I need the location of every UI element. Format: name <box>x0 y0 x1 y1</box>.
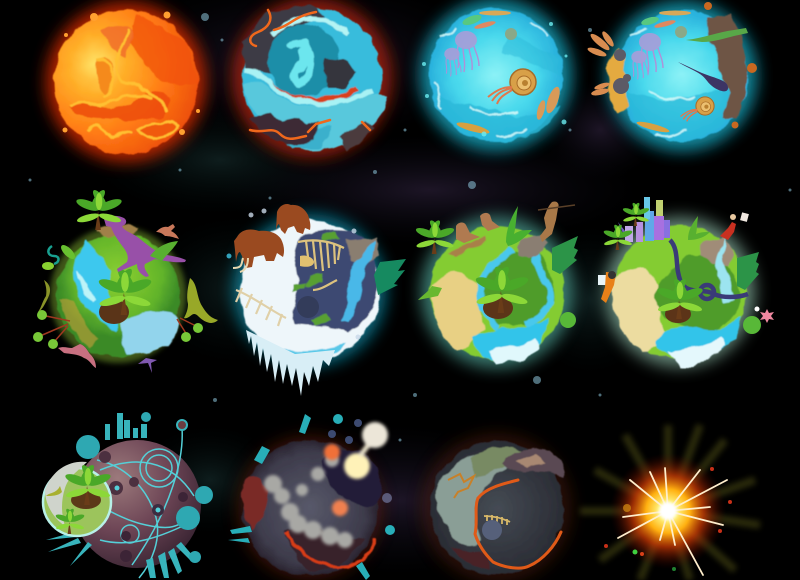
icon: interior dark green <box>480 250 554 326</box>
icon: mammoth small <box>276 204 310 234</box>
icon: satellite <box>177 420 187 430</box>
planet 6: ice age <box>226 204 406 396</box>
background: stars <box>28 13 792 442</box>
icon: lava cracks <box>475 480 561 568</box>
icon: final star burst <box>580 425 760 580</box>
icon: grey rocks <box>613 49 631 94</box>
icon: bubbles <box>422 22 568 136</box>
icon: conifers <box>552 236 578 274</box>
icon: dinosaur skeleton <box>298 240 344 290</box>
icon: central palm <box>656 277 704 319</box>
icon: top right rock <box>500 448 564 478</box>
icon: glass dome with palm <box>43 462 112 536</box>
icon: teal spheres <box>76 412 213 563</box>
icon: palm right <box>688 216 710 240</box>
icon: small white flower <box>754 306 760 312</box>
icon: dark fish <box>678 62 728 91</box>
icon: purple dinosaur <box>104 216 186 277</box>
icon: land left <box>605 46 628 114</box>
icon: icicles <box>246 330 335 396</box>
icon: left fronds <box>418 286 442 300</box>
icon: bottom lava zone <box>285 526 365 572</box>
icon: mammoth large <box>233 229 284 272</box>
icon: orange leaves <box>587 30 616 97</box>
icon: interior dark green <box>655 255 740 333</box>
icon: dark slate land <box>292 230 377 332</box>
icon: grey boulder <box>482 520 502 540</box>
icon: lava veins <box>250 10 370 139</box>
icon: fossil skeleton <box>484 515 510 525</box>
icon: coral <box>704 2 757 128</box>
icon: purple dark zone <box>322 450 381 508</box>
icon: blue rocks <box>328 419 392 503</box>
icon: conifers <box>737 252 759 290</box>
icon: bottom dark <box>452 548 490 570</box>
planet 4: ocean with first land <box>587 1 757 151</box>
icon: boulder <box>297 296 319 318</box>
icon: orange pterodactyl <box>156 224 179 239</box>
icon: grey rock <box>345 237 380 265</box>
icon: teal swirl and leaves <box>42 243 77 270</box>
icon: bush <box>743 316 761 334</box>
icon: fiery smoke puffs <box>324 440 372 516</box>
icon: climber with flag <box>720 212 749 240</box>
icon: central palm <box>474 265 530 313</box>
icon: green lizard <box>686 28 748 42</box>
icon: craters <box>99 451 188 562</box>
planet 9: future metal planet with dome <box>43 412 213 578</box>
icon: skyline bottom right <box>146 542 193 578</box>
icon: pink dinosaur <box>58 344 96 368</box>
icon: orange car with sign <box>598 271 616 303</box>
icon: ammonite <box>680 97 714 121</box>
icon: small jellyfish <box>631 51 648 79</box>
icon: seated humans <box>456 213 500 243</box>
icon: rock right <box>708 14 748 120</box>
icon: central palm <box>97 267 153 315</box>
icon: snowflakes <box>226 208 360 340</box>
icon: small jellyfish <box>444 48 461 76</box>
icon: big jellyfish <box>639 33 663 74</box>
icon: palm leaves <box>506 206 532 246</box>
icon: waterfall <box>342 240 376 322</box>
icon: bay <box>655 316 741 359</box>
icon: sage grey land <box>436 448 526 546</box>
icon: green dinosaur left <box>38 280 50 312</box>
coloured sparks <box>604 467 732 571</box>
icon: skyline top <box>105 413 147 440</box>
icon: top green-grey <box>470 447 522 476</box>
icon: palms near city <box>622 202 650 226</box>
icon: jungle rock island <box>99 300 129 324</box>
icon: log <box>448 236 486 257</box>
icon: grey rock <box>516 236 548 258</box>
icon: orbit rings <box>78 428 195 578</box>
planet 5: dinosaurs and jungle <box>33 188 218 373</box>
white thin rays <box>618 468 727 575</box>
icon: smoke trail <box>264 453 353 548</box>
planet 7: early humans <box>415 201 578 368</box>
planet 2: lava and water <box>232 0 392 158</box>
icon: pink flower <box>760 309 774 323</box>
icon: lava droplets <box>62 12 200 135</box>
icon: skyline bottom left <box>46 532 92 566</box>
icon: amber cracks on land <box>448 474 474 498</box>
icon: green patches <box>293 231 340 326</box>
icon: frond <box>150 241 178 261</box>
icon: palm <box>603 224 633 250</box>
icon: icy lake <box>121 311 179 355</box>
icon: left palm <box>415 219 455 254</box>
icon: beach <box>612 268 668 352</box>
icon: highway <box>670 240 748 299</box>
icon: bay <box>472 320 548 359</box>
planet 3: ocean with sea life <box>420 0 572 151</box>
icon: shrimp fossils <box>636 10 691 134</box>
icon: bush <box>560 312 576 328</box>
icon: central rock <box>483 297 513 319</box>
icon: sandy beach <box>431 272 486 351</box>
planet 8: modern city <box>598 197 774 368</box>
planet 10: exploding planet <box>228 414 395 580</box>
icon: purple creature <box>138 358 157 373</box>
icon: city skyscrapers <box>618 197 670 242</box>
icon: ammonite <box>488 69 536 104</box>
icon: rock and waterfall <box>700 237 734 265</box>
icon: teal debris <box>228 414 395 580</box>
icon: waterfall <box>75 240 120 332</box>
icon: green dinosaur right <box>184 278 218 323</box>
icon: ribs fossil <box>236 288 286 326</box>
icon: fossil shells <box>456 10 562 136</box>
icon: central rock <box>665 305 691 323</box>
icon: red zone <box>242 477 268 530</box>
icon: top palm <box>75 188 123 230</box>
icon: river <box>480 240 550 328</box>
icon: hunter with spear <box>538 201 575 242</box>
planet 11: dead planet <box>422 433 572 580</box>
icon: white smoke puff <box>362 422 388 448</box>
icon: leaf clusters on red stems <box>33 310 203 349</box>
icon: conifers <box>374 259 406 295</box>
planet 1: sun <box>46 2 206 162</box>
icon: big jellyfish <box>455 31 479 72</box>
background: nebula haze <box>90 0 660 575</box>
long dim rays <box>580 425 760 580</box>
